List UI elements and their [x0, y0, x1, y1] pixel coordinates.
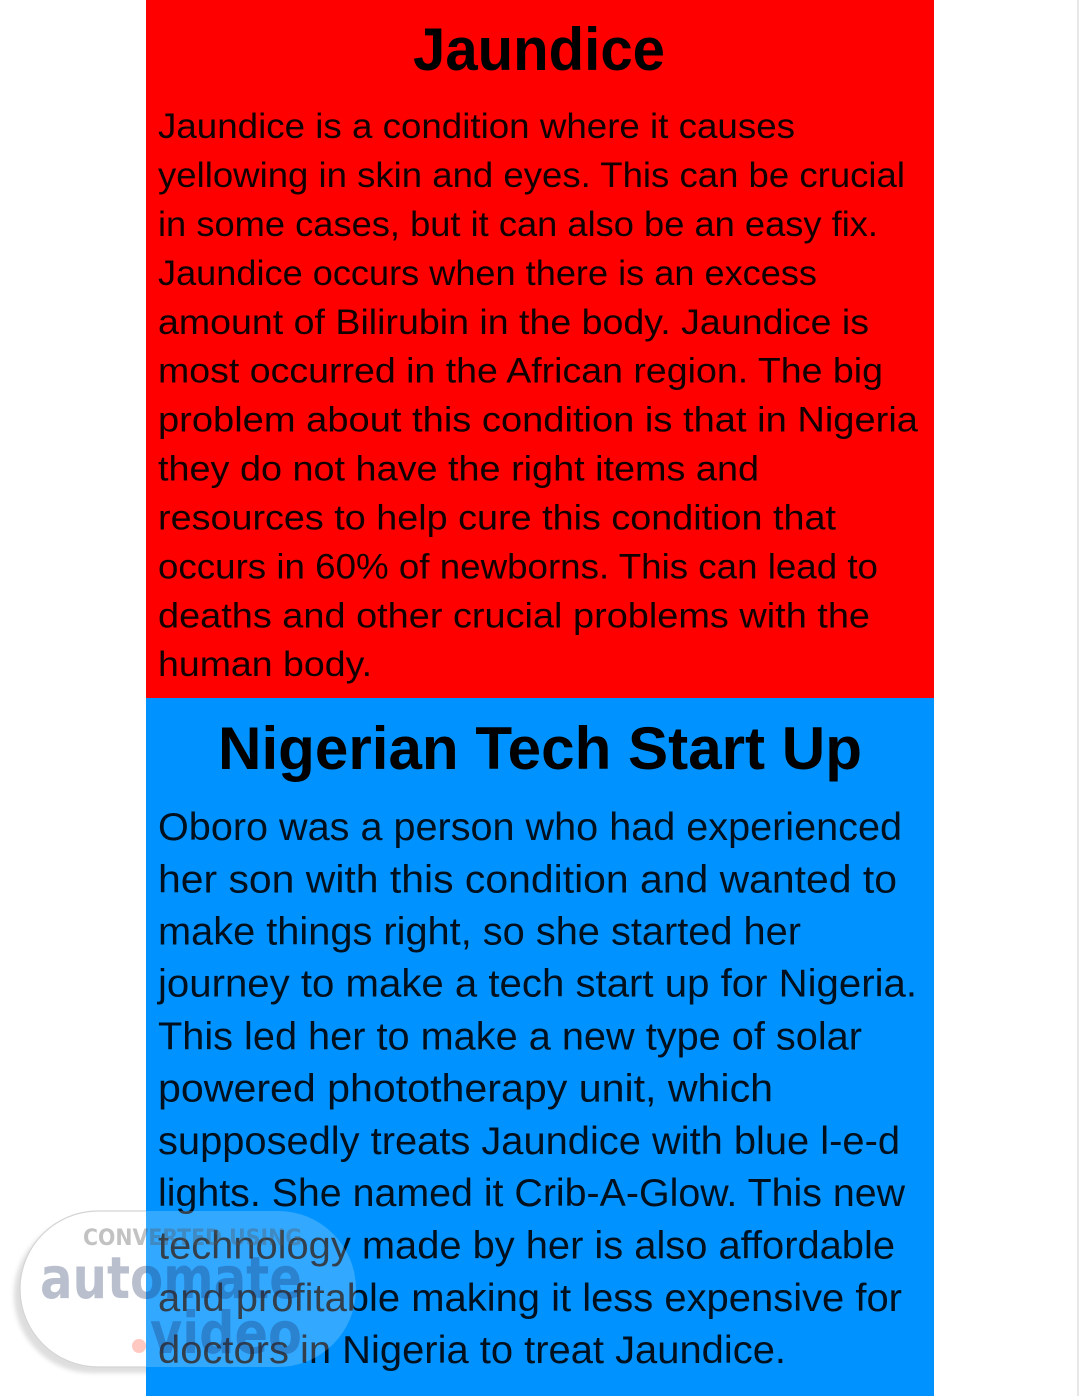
text block: Jaundice description: occurs in 60% of newborns. This can lead to — [158, 546, 878, 586]
text block: Oboro's start up story: her son with this condition and wanted to — [158, 858, 897, 902]
text block: Jaundice description: deaths and other crucial problems with the — [158, 596, 870, 636]
text block: Jaundice description: yellowing in skin and eyes. This can be crucial — [158, 155, 905, 195]
text block: Jaundice description — [158, 106, 918, 684]
text block: Jaundice description: they do not have the right items and — [158, 448, 759, 488]
watermark badge — [14, 1211, 356, 1373]
text block: Oboro's start up story — [157, 806, 917, 1372]
text block: Oboro's start up story: journey to make a tech start up for Nigeria. — [157, 962, 917, 1006]
text block: Oboro's start up story: make things right, so she started her — [158, 910, 801, 954]
text block: Oboro's start up story: Oboro was a person who had experienced — [158, 806, 902, 849]
text block: Jaundice description: in some cases, but it can also be an easy fix. — [158, 204, 878, 244]
text block: Oboro's start up story: lights. She named it Crib-A-Glow. This new — [158, 1172, 905, 1215]
watermark dot — [132, 1339, 146, 1353]
watermark text: automate: automate — [40, 1244, 302, 1312]
watermark text: converted using: CONVERTED USING — [83, 1226, 302, 1251]
text block: Jaundice description: resources to help cure this condition that — [158, 498, 836, 538]
heading: Jaundice: Jaundice — [413, 16, 665, 83]
text block: Oboro's start up story: powered phototherapy unit, which — [158, 1068, 773, 1110]
panel: Nigerian Tech Start Up — [146, 698, 934, 1396]
text block: Jaundice description: Jaundice occurs when there is an excess — [158, 253, 817, 293]
text block: Oboro's start up story: doctors in Nigeria to treat Jaundice. — [158, 1329, 786, 1372]
text block: Oboro's start up story: supposedly treats Jaundice with blue l-e-d — [158, 1120, 900, 1163]
text block: Oboro's start up story: technology made by her is also affordable — [158, 1224, 895, 1268]
text block: Jaundice description: human body. — [158, 644, 372, 684]
text block: Jaundice description: problem about this condition is that in Nigeria — [158, 400, 918, 440]
text block: Jaundice description: most occurred in the African region. The big — [158, 350, 883, 390]
heading: Nigerian Tech Start Up: Nigerian Tech Start Up — [218, 715, 862, 782]
panel: Jaundice — [146, 0, 934, 698]
text block: Jaundice description: Jaundice is a condition where it causes — [158, 106, 795, 146]
text block: Oboro's start up story: and profitable making it less expensive for — [158, 1277, 902, 1320]
watermark text: video: video — [150, 1299, 302, 1367]
text block: Jaundice description: amount of Bilirubin in the body. Jaundice is — [158, 302, 869, 342]
text block: Oboro's start up story: This led her to make a new type of solar — [158, 1016, 862, 1058]
